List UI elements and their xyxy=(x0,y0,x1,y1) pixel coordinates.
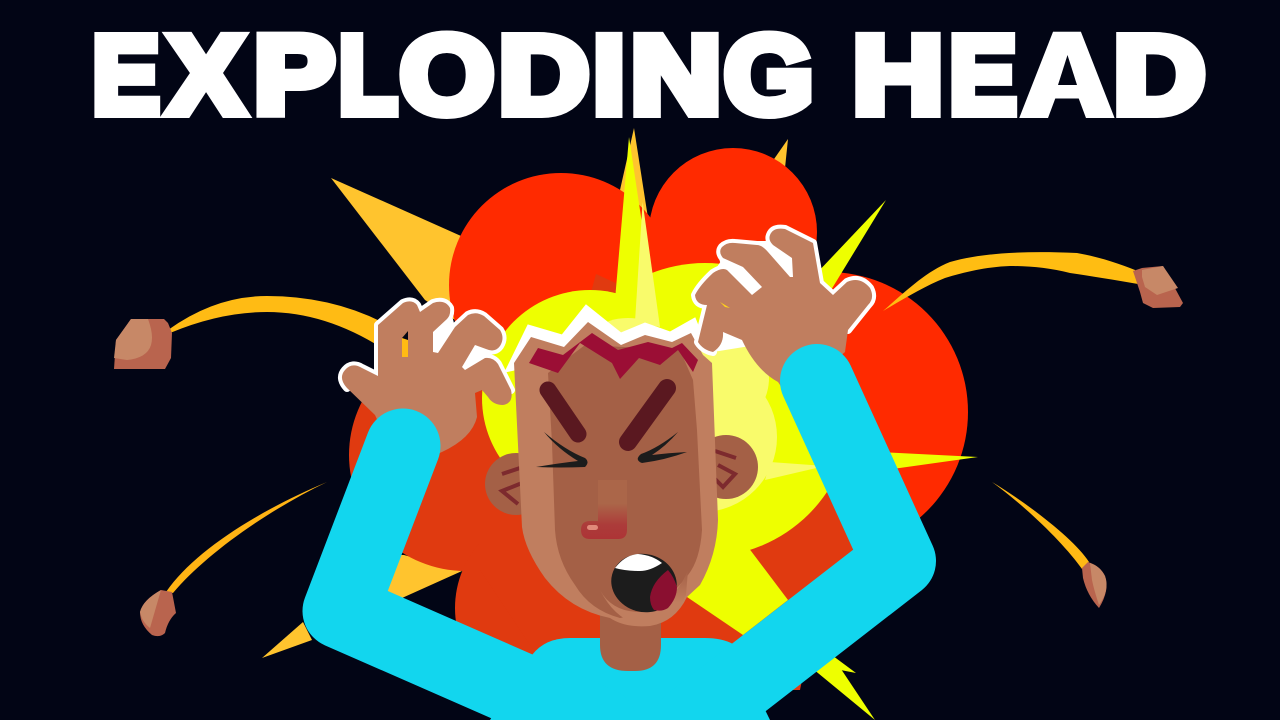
flying rock trail: lower left xyxy=(166,482,327,593)
flying rock trail: lower right xyxy=(992,482,1089,569)
explosion: light yellow core xyxy=(602,202,825,512)
left hand: gap between fingers xyxy=(402,331,408,357)
title: N xyxy=(631,14,721,137)
right hand: white wedge between fingers xyxy=(757,245,793,277)
left arm xyxy=(340,446,600,720)
right hand xyxy=(695,229,872,400)
right arm xyxy=(690,381,899,720)
flying rock: top left xyxy=(114,319,172,369)
explosion: orange burst spikes xyxy=(262,128,788,658)
flying rock: lower right xyxy=(1082,562,1107,608)
flying rock: lower left xyxy=(140,590,176,636)
head: right eye xyxy=(638,432,687,463)
explosion: red clouds xyxy=(449,148,968,552)
crack white outline xyxy=(505,305,708,372)
head: nose xyxy=(581,480,627,539)
title: L xyxy=(339,14,397,137)
head: left eyebrow xyxy=(548,390,578,434)
explosion: dark orange clouds xyxy=(349,274,860,706)
head: exposed crimson crack xyxy=(529,333,698,379)
title: E xyxy=(949,14,1016,137)
neck xyxy=(600,600,661,671)
left hand: white wedge between fingers xyxy=(433,308,455,353)
head: right eyebrow xyxy=(628,388,667,442)
title: H xyxy=(853,14,943,137)
flying rock: top right xyxy=(1133,266,1183,308)
title: D xyxy=(1114,14,1205,137)
left hand xyxy=(342,301,512,470)
head: chin highlight xyxy=(600,570,688,625)
head: open mouth xyxy=(605,546,683,620)
title: X xyxy=(168,14,244,137)
title: letter A counter xyxy=(1058,55,1077,85)
title: D xyxy=(499,14,589,137)
head: left eye xyxy=(536,432,588,468)
left ear xyxy=(485,453,547,515)
flying rock trail: top left xyxy=(168,296,382,348)
title: P xyxy=(254,14,335,137)
right hand: gap between fingers xyxy=(720,302,730,308)
explosion: yellow cloud and big lower spike xyxy=(482,137,875,720)
head: outer skin xyxy=(514,322,718,626)
head: darker face xyxy=(548,345,702,618)
torso xyxy=(490,638,770,720)
left hand: lower white wedge between fingers xyxy=(462,345,500,370)
head xyxy=(514,322,718,626)
title: G xyxy=(724,14,814,137)
left hand: skin xyxy=(342,301,512,470)
right hand: lower white wedge between fingers xyxy=(713,258,762,295)
left hand: white finger outline xyxy=(342,301,511,390)
right ear xyxy=(694,435,758,499)
flying rock trail: top right xyxy=(883,252,1138,311)
title: E xyxy=(92,14,160,137)
title: O xyxy=(400,14,494,137)
right hand: white finger outline xyxy=(695,229,872,352)
right hand: skin xyxy=(695,229,872,400)
title: A xyxy=(1024,14,1110,137)
explosion: yellow spikes xyxy=(815,200,978,470)
title: I xyxy=(593,14,625,137)
